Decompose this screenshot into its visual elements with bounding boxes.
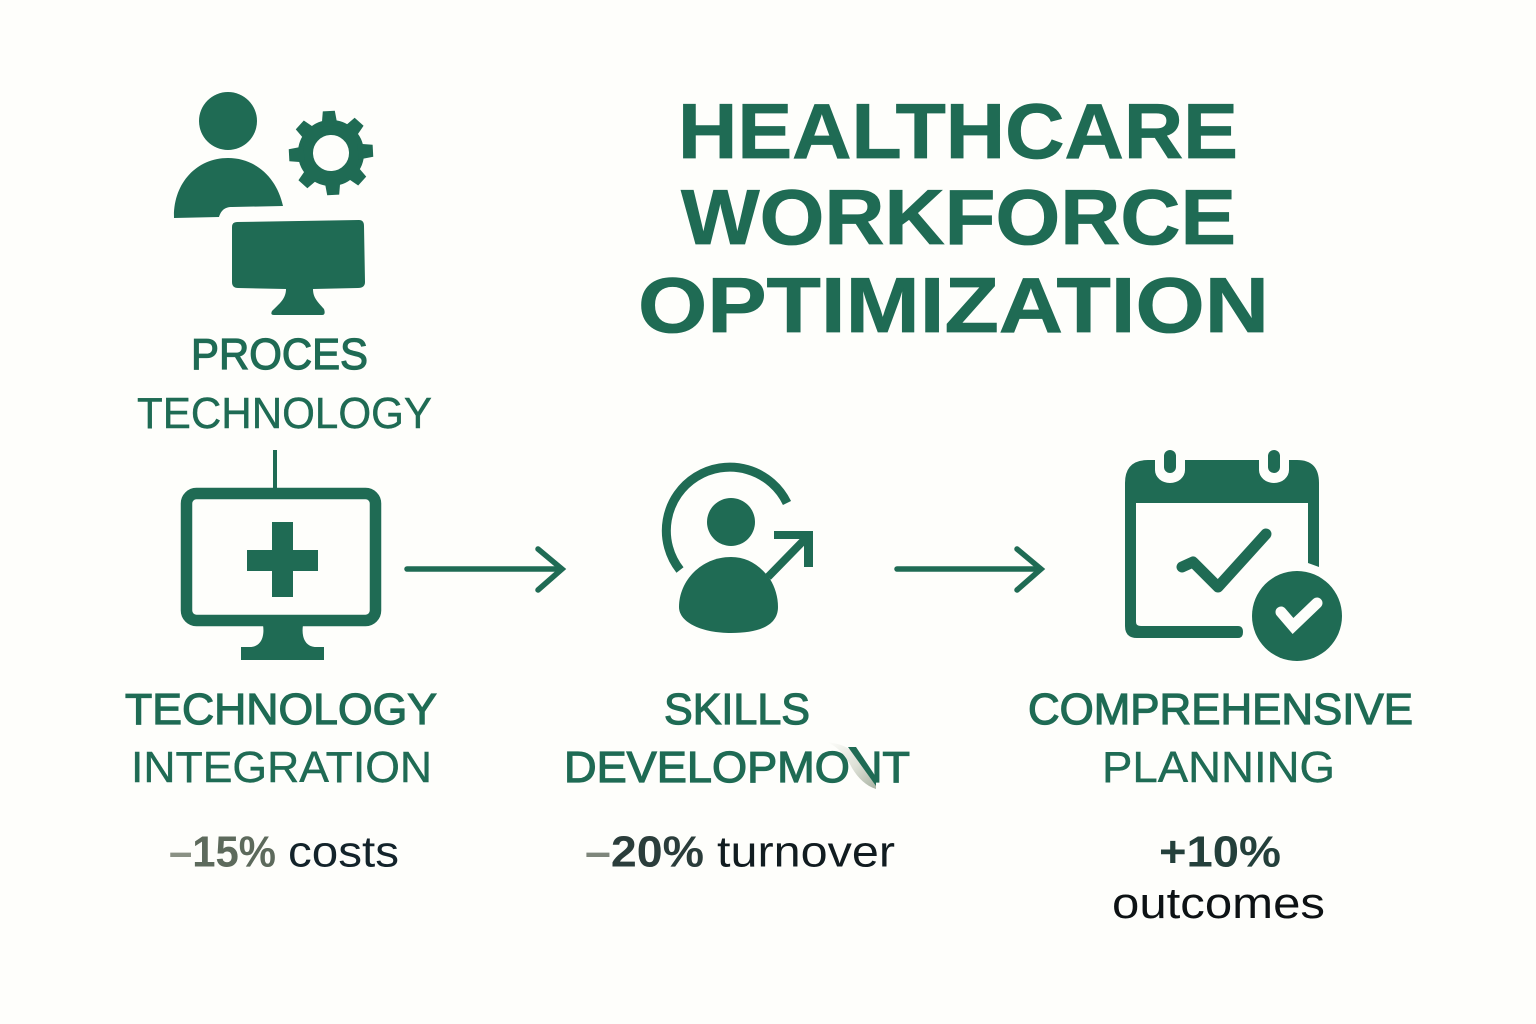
label: skills development: DEVELOPMONT [564,743,910,792]
label: proces technology [137,330,432,438]
title: OPTIMIZATION [638,261,1269,349]
arrow: technology to skills [407,549,562,590]
stat: costs: costs [288,828,399,876]
label: skills development [564,685,910,792]
label: comprehensive planning: COMPREHENSIVE [1028,685,1413,734]
stat: outcomes: outcomes [1112,879,1325,928]
stat: costs [169,828,399,876]
arrow: skills to planning [897,549,1041,590]
label: technology integration [125,685,437,792]
label: technology integration: INTEGRATION [131,743,432,792]
label: proces technology: TECHNOLOGY [137,389,432,438]
title: WORKFORCE [681,173,1236,261]
label: proces technology: PROCES [191,330,368,379]
stat: outcomes: +10% [1159,828,1281,876]
label: comprehensive planning [1028,685,1413,792]
stat: outcomes [1112,828,1325,928]
label: skills development: SKILLS [664,685,810,734]
label: technology integration: TECHNOLOGY [125,685,437,734]
icon: medical monitor [186,450,376,660]
icon: person with gear and monitor [174,92,375,315]
icon: person development [666,467,813,633]
icon: page peel artifact [827,742,876,789]
stat: turnover: turnover [717,828,895,876]
title [638,87,1269,349]
label: comprehensive planning: PLANNING [1102,743,1335,792]
stat: costs: –15% [169,828,276,876]
stat: turnover [585,828,895,876]
stat: turnover: –20% [585,828,704,876]
title: HEALTHCARE [678,87,1238,175]
icon: calendar with check badge [1125,450,1342,661]
